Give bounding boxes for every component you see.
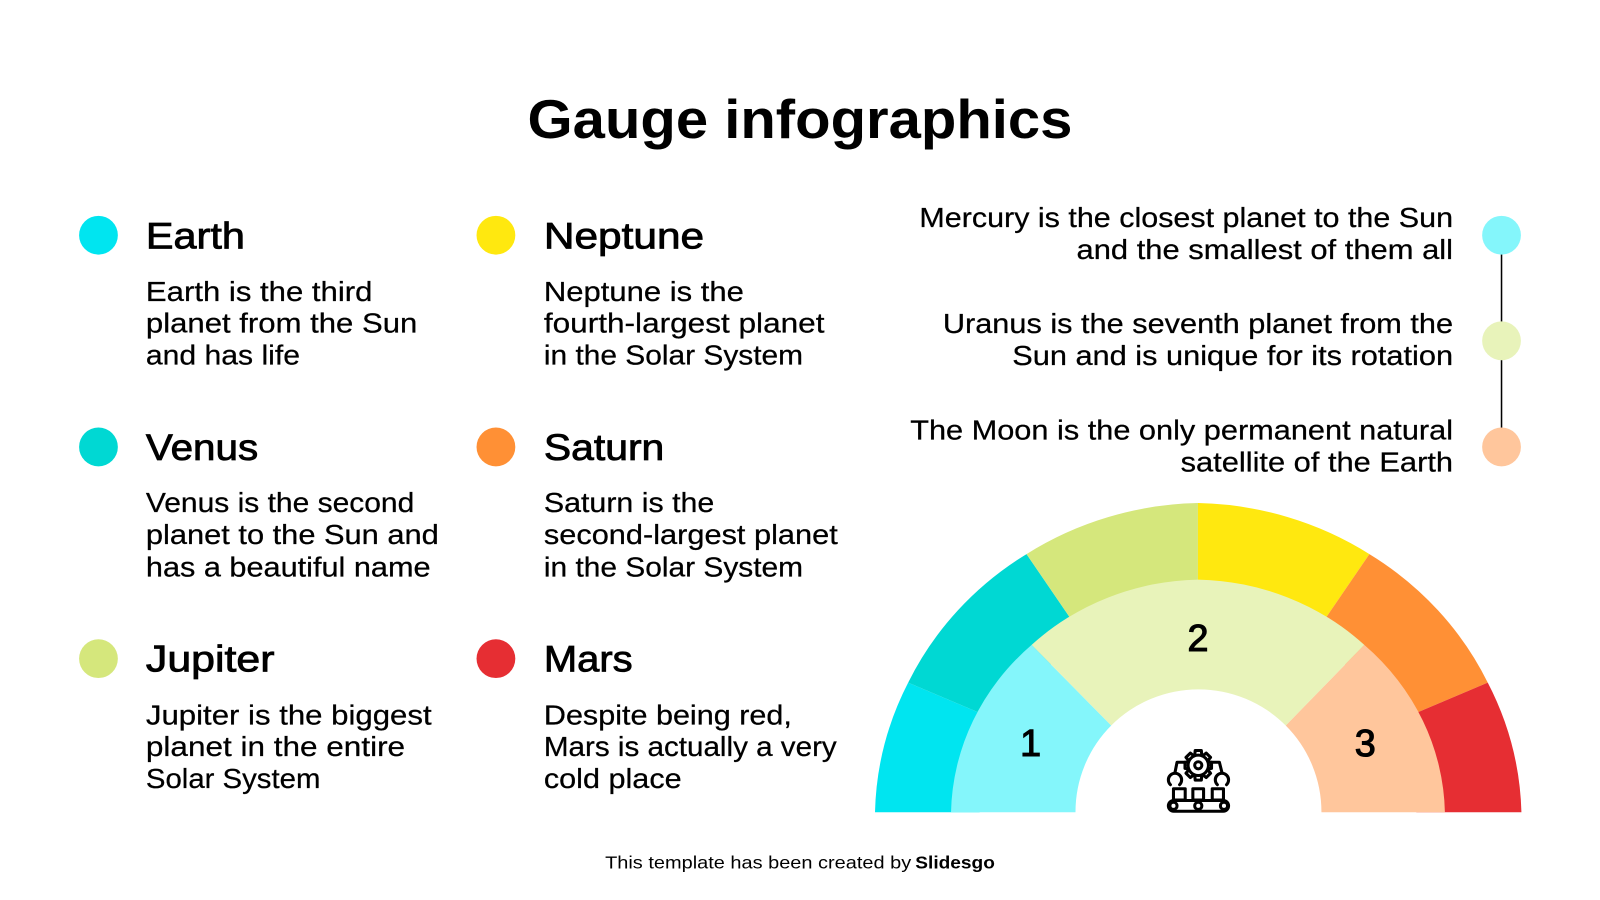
panel: Saturn <box>477 427 838 583</box>
inner ring segment 1 <box>951 645 1111 812</box>
outer ring segment: teal <box>908 554 1082 719</box>
panel: Neptune <box>477 215 825 370</box>
text: Mercury: Mercury is the closest planet to the Sun <box>919 202 1453 233</box>
text: Jupiter description: planet in the entire <box>146 731 405 762</box>
outer ring segment: red <box>1401 683 1521 812</box>
text: Mercury: and the smallest of them all <box>1077 234 1453 265</box>
icon: Venus dot <box>79 428 118 466</box>
outer ring segment: orange <box>1314 554 1488 719</box>
text: Neptune description: Neptune is the <box>544 276 744 307</box>
text: Saturn description: Saturn is the <box>544 487 714 518</box>
panel: Venus <box>79 427 439 583</box>
gauge label 3: 3 <box>1355 722 1376 764</box>
icon: Jupiter dot <box>79 639 118 678</box>
heading: Earth: Earth <box>146 215 245 256</box>
outer ring segment: lime <box>1027 503 1198 635</box>
icon: factory conveyor with gear and robot arms <box>1168 751 1229 811</box>
text: Venus description <box>146 487 439 583</box>
text: Uranus: Sun and is unique for its rotation <box>1012 340 1453 371</box>
panel: Earth <box>79 215 417 370</box>
text: Earth description: and has life <box>146 339 300 370</box>
icon: Earth dot <box>79 216 118 255</box>
panel: Jupiter <box>79 638 432 794</box>
text: Jupiter description <box>146 699 432 794</box>
panel: Mars <box>477 638 837 794</box>
heading: Jupiter: Jupiter <box>146 638 274 679</box>
outer ring segment: cyan <box>875 683 995 812</box>
text: Mars description: Mars is actually a very <box>544 731 837 762</box>
text: Saturn description: second-largest planet <box>544 519 838 550</box>
heading: Venus: Venus <box>146 427 258 468</box>
text: Venus description: has a beautiful name <box>146 552 431 583</box>
text: Venus description: planet to the Sun and <box>146 519 439 550</box>
gauge label 2: 2 <box>1187 617 1208 659</box>
icon: Mars dot <box>477 639 515 678</box>
heading: Neptune: Neptune <box>544 215 704 256</box>
text: Saturn description: in the Solar System <box>544 552 803 583</box>
text: Moon <box>910 414 1453 477</box>
text: Mars description <box>544 699 837 794</box>
text: Uranus: Uranus is the seventh planet from the <box>943 308 1453 339</box>
outer ring segment: yellow <box>1198 503 1369 635</box>
icon: Neptune dot <box>477 216 515 255</box>
gauge label 1: 1 <box>1020 722 1041 764</box>
title: Gauge infographics <box>528 88 1072 150</box>
chart: gauge <box>875 503 1521 812</box>
text: Neptune description: fourth-largest planet <box>544 308 825 339</box>
text: Earth description: planet from the Sun <box>146 308 417 339</box>
text: Mercury <box>919 202 1453 265</box>
text: Mars description: Despite being red, <box>544 699 792 730</box>
text: Jupiter description: Solar System <box>146 763 320 794</box>
inner ring segment 2 <box>1032 580 1364 726</box>
timeline connector dots <box>1482 216 1521 466</box>
inner ring segment 3 <box>1286 645 1445 812</box>
heading: Saturn: Saturn <box>544 427 664 468</box>
text: Jupiter description: Jupiter is the biggest <box>146 699 432 730</box>
text: Saturn description <box>544 487 838 583</box>
text: Uranus <box>943 308 1453 371</box>
footer credit: This template has been created by <box>605 852 911 872</box>
text: Moon: satellite of the Earth <box>1181 446 1453 477</box>
text: Moon: The Moon is the only permanent natural <box>910 414 1453 445</box>
text: Neptune description: in the Solar System <box>544 339 803 370</box>
heading: Mars: Mars <box>544 638 633 679</box>
footer credit: Slidesgo <box>915 852 995 872</box>
text: Earth description <box>146 276 417 370</box>
text: Earth description: Earth is the third <box>146 276 372 307</box>
text: Neptune description <box>544 276 825 370</box>
text: Mars description: cold place <box>544 763 682 794</box>
icon: Saturn dot <box>477 428 515 466</box>
text: Venus description: Venus is the second <box>146 487 414 518</box>
